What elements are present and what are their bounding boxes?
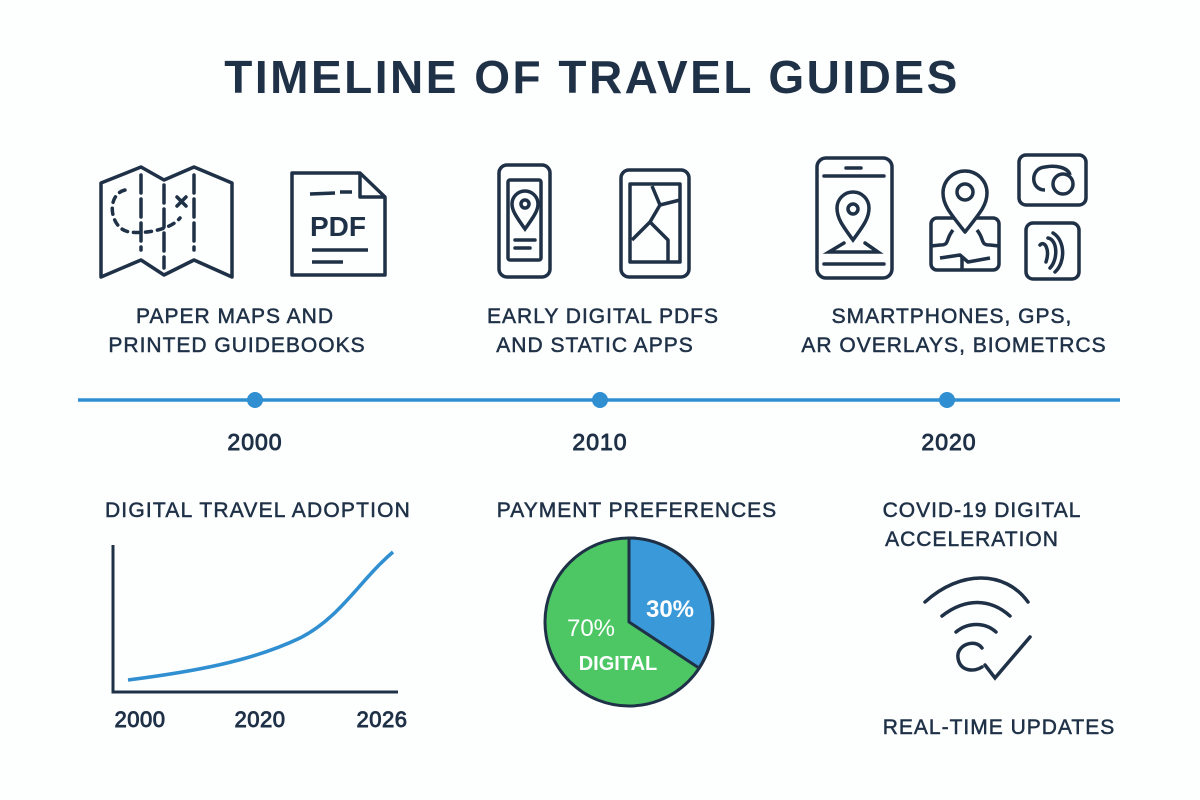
years: 2000: [227, 429, 283, 455]
icon: pdf document: PDF: [310, 211, 366, 242]
chart axis labels: 2000: [115, 707, 165, 732]
years: 2020: [921, 429, 977, 455]
heading: covid acceleration: [883, 499, 1081, 551]
heading: payment preferences: PAYMENT PREFERENCES: [497, 499, 777, 522]
icon: smartphone with pin: [817, 158, 892, 278]
chart axis labels: 2026: [357, 707, 407, 732]
heading: digital travel adoption: DIGITAL TRAVEL ADOPTION: [105, 499, 411, 522]
timeline: [78, 392, 1120, 408]
label: paper maps: [108, 305, 366, 357]
icon: tablet with pin: [499, 165, 550, 277]
label: paper maps: PRINTED GUIDEBOOKS: [108, 334, 366, 357]
icon: map pin on map: [931, 171, 999, 270]
icon: phone with map: [621, 170, 689, 277]
label: smartphones: [801, 305, 1107, 357]
icon: fingerprint: [1026, 223, 1079, 279]
label: paper maps: PAPER MAPS AND: [136, 305, 334, 328]
icon: pdf document: [292, 173, 385, 275]
icon: face recognition: [1019, 155, 1086, 205]
title: TIMELINE OF TRAVEL GUIDES: [224, 51, 960, 103]
pie chart: DIGITAL: [579, 653, 657, 675]
years: [227, 429, 977, 455]
label: smartphones: AR OVERLAYS, BIOMETRCS: [801, 334, 1107, 357]
pie chart: 70%: [567, 615, 615, 642]
label: real-time updates: REAL-TIME UPDATES: [883, 716, 1115, 739]
heading: covid acceleration: COVID-19 DIGITAL: [883, 499, 1081, 522]
label: smartphones: SMARTPHONES, GPS,: [832, 305, 1072, 328]
icon: paper map: [101, 167, 232, 277]
label: early digital: EARLY DIGITAL PDFS: [487, 305, 719, 328]
pie chart: [545, 538, 713, 706]
years: 2010: [572, 429, 628, 455]
chart axis labels: 2020: [235, 707, 285, 732]
label: early digital: [487, 305, 719, 357]
chart axis labels: [115, 707, 407, 732]
line chart: [113, 545, 398, 692]
label: early digital: AND STATIC APPS: [496, 334, 694, 357]
icon: wifi check: [925, 578, 1030, 678]
heading: covid acceleration: ACCELERATION: [885, 528, 1059, 551]
pie chart: 30%: [646, 596, 694, 623]
